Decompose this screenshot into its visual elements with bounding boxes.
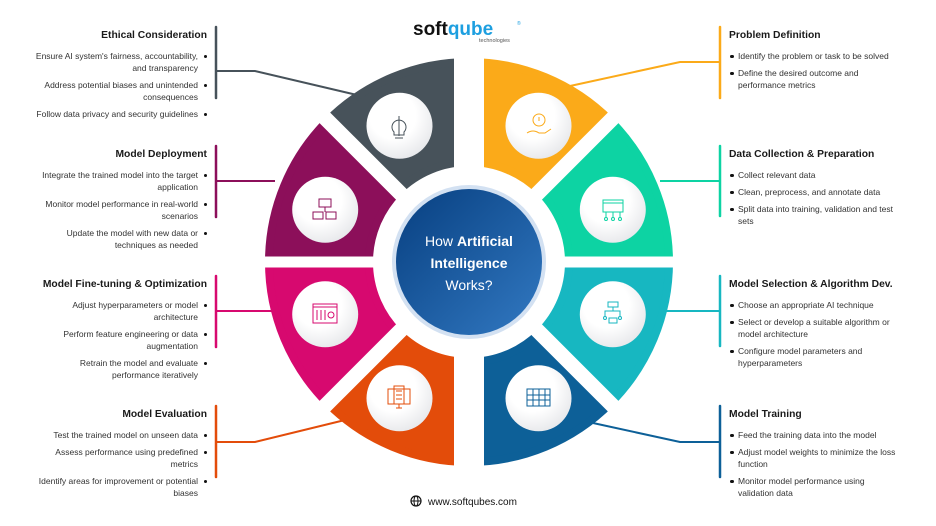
text: Model Training: Monitor model performance using bbox=[738, 476, 865, 486]
center circle: Intelligence bbox=[430, 255, 508, 271]
text: Model Evaluation: biases bbox=[173, 488, 198, 498]
text: Problem Definition: Identify the problem or task to be solved bbox=[738, 51, 889, 61]
text: Ethical Consideration: Ethical Consideration bbox=[101, 30, 207, 41]
text: Model Selection: Configure model parameters and bbox=[738, 346, 862, 356]
text: Model Deployment: Integrate the trained model into the target bbox=[42, 170, 198, 180]
icon circles bbox=[292, 93, 646, 431]
text: Model Evaluation bbox=[39, 409, 207, 498]
text: Model Selection: hyperparameters bbox=[738, 358, 802, 368]
text: Model Fine-tuning: Adjust hyperparameters or model bbox=[72, 300, 198, 310]
text: Ethical Consideration: Follow data privacy and security guidelines bbox=[36, 109, 198, 119]
icon: lightbulb (ethical) bbox=[392, 116, 406, 138]
text: Data Collection bbox=[729, 149, 893, 226]
text: Model Selection bbox=[729, 279, 893, 368]
logo: softqube bbox=[413, 19, 493, 40]
text: Data Collection: Split data into training, validation and test bbox=[738, 204, 893, 214]
icon: hand bulb (problem) bbox=[527, 114, 551, 133]
text: Model Fine-tuning: architecture bbox=[154, 312, 198, 322]
text: Model Evaluation: Test the trained model on unseen data bbox=[53, 430, 198, 440]
footer: website: www.softqubes.com bbox=[427, 497, 517, 508]
text: Model Training: validation data bbox=[738, 488, 793, 498]
icon: computers (deployment) bbox=[313, 199, 336, 219]
logo: technologies bbox=[479, 38, 510, 44]
icon: data board (data collection) bbox=[603, 200, 623, 220]
text: Model Evaluation: Model Evaluation bbox=[122, 409, 207, 420]
text: Model Training: Feed the training data into the model bbox=[738, 430, 876, 440]
text: Model Training bbox=[729, 409, 896, 498]
text: Model Deployment: techniques as needed bbox=[115, 240, 198, 250]
logo bbox=[413, 19, 521, 44]
text: Model Training: function bbox=[738, 459, 768, 469]
text: Ethical Consideration: Ensure AI system's fairness, accountability, bbox=[36, 51, 198, 61]
ring segments bbox=[269, 62, 669, 462]
icon: flowchart (model selection) bbox=[604, 302, 622, 323]
vertical bars bbox=[216, 27, 720, 477]
text: Ethical Consideration: and transparency bbox=[132, 63, 198, 73]
text: Data Collection: Clean, preprocess, and annotate data bbox=[738, 187, 880, 197]
text: Model Fine-tuning bbox=[43, 279, 207, 380]
text: Model Evaluation: Identify areas for improvement or potential bbox=[39, 476, 198, 486]
text: Model Fine-tuning: performance iteratively bbox=[112, 370, 198, 380]
center circle: Works? bbox=[445, 277, 493, 293]
icon: monitor checklist (evaluation) bbox=[388, 386, 410, 408]
text: Model Fine-tuning: Perform feature engineering or data bbox=[63, 329, 198, 339]
text: Model Evaluation: metrics bbox=[171, 459, 198, 469]
text: Problem Definition: performance metrics bbox=[738, 80, 815, 90]
text: Model Deployment: Monitor model performance in real-world bbox=[45, 199, 198, 209]
text: Model Fine-tuning: Model Fine-tuning & Optimization bbox=[43, 279, 207, 290]
text: Data Collection: Collect relevant data bbox=[738, 170, 816, 180]
text: Problem Definition bbox=[729, 30, 889, 90]
text: Model Deployment bbox=[42, 149, 207, 250]
text: Ethical Consideration bbox=[36, 30, 207, 119]
icon: settings panel (fine-tuning) bbox=[313, 304, 337, 323]
text: Model Fine-tuning: augmentation bbox=[146, 341, 198, 351]
text: Ethical Consideration: consequences bbox=[143, 92, 198, 102]
text: Model Selection: model architecture bbox=[738, 329, 808, 339]
text: Model Selection: Model Selection & Algorithm Dev. bbox=[729, 279, 893, 290]
text: Ethical Consideration: Address potential biases and unintended bbox=[44, 80, 198, 90]
center circle: How Artificial bbox=[425, 233, 513, 249]
connector lines bbox=[216, 62, 720, 442]
text: Data Collection: Data Collection & Preparation bbox=[729, 149, 874, 160]
center circle bbox=[392, 185, 546, 339]
text: Data Collection: sets bbox=[738, 216, 754, 226]
text: Model Deployment: Model Deployment bbox=[115, 149, 207, 160]
text: Problem Definition: Define the desired outcome and bbox=[738, 68, 858, 78]
icon: grid globe (training) bbox=[527, 389, 550, 406]
text: Model Evaluation: Assess performance using predefined bbox=[55, 447, 198, 457]
text: Model Selection: Select or develop a suitable algorithm or bbox=[738, 317, 890, 327]
text: Model Deployment: Update the model with new data or bbox=[67, 228, 198, 238]
logo: ® bbox=[517, 20, 521, 27]
text: Model Deployment: scenarios bbox=[162, 211, 198, 221]
text: Model Deployment: application bbox=[157, 182, 198, 192]
text: Model Training: Model Training bbox=[729, 409, 802, 420]
text: Model Training: Adjust model weights to minimize the loss bbox=[738, 447, 895, 457]
text: Model Fine-tuning: Retrain the model and evaluate bbox=[80, 358, 198, 368]
text: Model Selection: Choose an appropriate AI technique bbox=[738, 300, 874, 310]
text: Problem Definition: Problem Definition bbox=[729, 30, 821, 41]
